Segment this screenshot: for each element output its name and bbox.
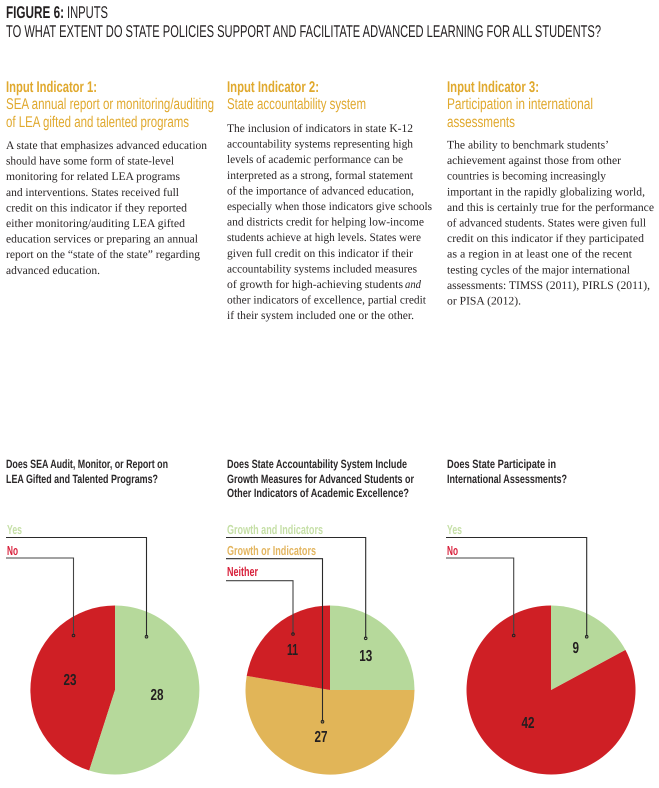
chart title: SEA audit: Does SEA Audit, Monitor, or Report on	[6, 457, 168, 471]
chart title: accountability system: Does State Accountability System Include	[227, 457, 407, 471]
pie chart: SEA audit: 23	[64, 672, 77, 689]
pie chart: accountability system	[246, 606, 415, 775]
pie chart: international assessments	[467, 606, 636, 774]
legend: chart 3 no	[446, 543, 515, 637]
text block: indicator 2 description: and	[405, 278, 421, 291]
text block: indicator 2 description: accountability systems representing high	[227, 138, 413, 151]
heading: input indicator 1: Input Indicator 1:	[6, 79, 97, 96]
title	[6, 3, 601, 41]
text block: indicator 2 description: and districts credit for helping low-income	[227, 216, 424, 229]
heading: input indicator 3: Participation in international	[447, 96, 593, 113]
text block: indicator 3 description: assessments: TIMSS (2011), PIRLS (2011),	[447, 279, 650, 292]
legend: chart 3 no: No	[447, 543, 458, 558]
text block: indicator 3 description: of advanced students. States were given full	[447, 216, 646, 230]
heading: input indicator 2	[227, 79, 366, 113]
pie chart: SEA audit	[30, 605, 199, 774]
text block: indicator 2 description: other indicators of excellence, partial credit	[227, 294, 427, 307]
text block: indicator 2 description: if their system included one or the other.	[227, 309, 414, 322]
legend: chart 1 yes: Yes	[7, 522, 22, 537]
chart title: SEA audit	[6, 457, 168, 486]
chart title: accountability system: Growth Measures for Advanced Students or	[227, 472, 414, 486]
heading: input indicator 3	[447, 79, 593, 131]
legend: chart 2 growth and indicators	[226, 522, 367, 640]
chart title: SEA audit: LEA Gifted and Talented Programs?	[6, 472, 158, 486]
title: FIGURE 6:	[6, 3, 64, 22]
legend: chart 2 growth or indicators: Growth or Indicators	[227, 543, 316, 558]
text block: indicator 2 description: given full credit on this indicator if their	[227, 247, 413, 260]
legend: chart 2 growth or indicators	[226, 543, 324, 723]
text block: indicator 1 description: credit on this indicator if they reported	[6, 201, 187, 214]
title: INPUTS	[67, 3, 108, 22]
chart title: international assessments: Does State Participate in	[447, 457, 556, 471]
pie chart: SEA audit: 28	[150, 687, 164, 704]
text block: indicator 1 description	[6, 139, 207, 277]
text block: indicator 1 description: either monitoring/auditing LEA gifted	[6, 217, 185, 230]
heading: input indicator 1: SEA annual report or monitoring/auditing	[6, 96, 214, 113]
legend: chart 3 yes: Yes	[447, 522, 462, 537]
text block: indicator 2 description: especially when those indicators give schools	[227, 200, 432, 213]
text block: indicator 2 description: levels of academic performance can be	[227, 153, 403, 166]
text block: indicator 1 description: education services or preparing an annual	[6, 233, 198, 246]
heading: input indicator 2: Input Indicator 2:	[227, 79, 319, 96]
text block: indicator 3 description: countries is becoming increasingly	[447, 170, 606, 183]
heading: input indicator 1: of LEA gifted and talented programs	[6, 114, 189, 131]
text block: indicator 2 description	[227, 122, 432, 322]
text block: indicator 3 description: as a region in at least one of the recent	[447, 248, 633, 261]
text block: indicator 2 description: interpreted as a strong, formal statement	[227, 169, 414, 182]
text block: indicator 3 description: achievement against those from other	[447, 154, 621, 167]
legend: chart 2 neither: Neither	[227, 564, 258, 579]
chart title: accountability system: Other Indicators of Academic Excellence?	[227, 486, 409, 500]
legend: chart 3 yes	[446, 522, 588, 638]
pie chart: accountability system: 11	[287, 642, 298, 659]
text block: indicator 1 description: should have some form of state-level	[6, 155, 174, 168]
text block: indicator 2 description: students achieve at high levels. States were	[227, 231, 421, 244]
legend: chart 2 neither	[226, 564, 294, 635]
chart title: international assessments: International Assessments?	[447, 472, 567, 486]
chart title: international assessments	[447, 457, 567, 486]
text block: indicator 1 description: A state that emphasizes advanced education	[6, 139, 207, 152]
text block: indicator 2 description: accountability systems included measures	[227, 262, 417, 275]
legend: chart 1 yes	[6, 522, 148, 638]
heading: input indicator 3: Input Indicator 3:	[447, 79, 539, 96]
heading: input indicator 1	[6, 79, 214, 131]
text block: indicator 3 description: or PISA (2012).	[447, 294, 521, 308]
pie chart: accountability system: 27	[314, 729, 328, 746]
text block: indicator 2 description: of growth for high-achieving students	[227, 278, 403, 291]
legend: chart 2 growth and indicators: Growth and Indicators	[227, 522, 323, 537]
heading: input indicator 3: assessments	[447, 114, 515, 131]
text block: indicator 1 description: monitoring for related LEA programs	[6, 170, 180, 183]
text block: indicator 3 description: important in the rapidly globalizing world,	[447, 185, 645, 198]
pie chart: accountability system: 13	[359, 648, 372, 665]
text block: indicator 3 description: and this is certainly true for the performance	[447, 201, 654, 214]
heading: input indicator 2: State accountability system	[227, 96, 366, 113]
text block: indicator 3 description: testing cycles of the major international	[447, 263, 630, 276]
pie chart: international assessments: 42	[522, 715, 535, 732]
text block: indicator 2 description: of the importance of advanced education,	[227, 184, 414, 197]
chart title: accountability system	[227, 457, 414, 500]
text block: indicator 1 description: advanced education.	[6, 264, 100, 277]
legend: chart 1 no: No	[7, 543, 18, 558]
text block: indicator 1 description: report on the “state of the state” regarding	[6, 248, 200, 261]
text block: indicator 2 description: The inclusion of indicators in state K-12	[227, 122, 413, 135]
pie chart: international assessments: 9	[572, 640, 579, 657]
legend: chart 1 no	[6, 543, 75, 637]
text block: indicator 3 description: The ability to benchmark students’	[447, 138, 609, 152]
text block: indicator 3 description: credit on this indicator if they participated	[447, 232, 644, 245]
text block: indicator 1 description: and interventions. States received full	[6, 186, 179, 199]
text block: indicator 3 description	[447, 138, 654, 308]
